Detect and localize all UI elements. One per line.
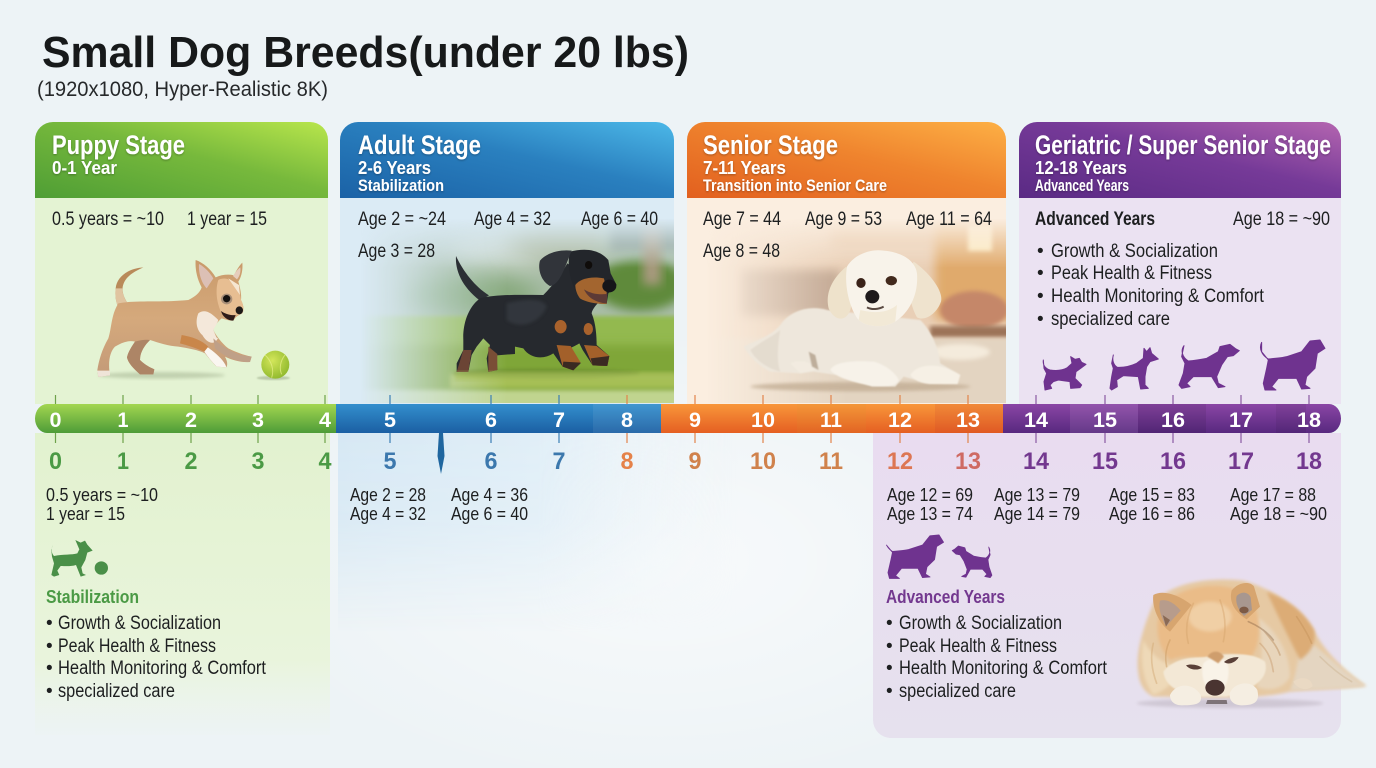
timeline numbers: 13 — [956, 408, 980, 432]
list: geriatric care: • — [1037, 241, 1044, 262]
list: puppy care: • — [46, 636, 53, 657]
header: geriatric: 12-18 Years — [1035, 157, 1127, 178]
lower ages: geriatric: Age 13 = 79 — [994, 484, 1080, 505]
timeline numbers: 9 — [689, 408, 701, 432]
ages: adult — [358, 209, 658, 262]
lower ages: adult: Age 4 = 32 — [350, 503, 426, 524]
header: puppy — [35, 122, 328, 198]
lower scale numbers: 5 — [384, 448, 396, 475]
ages: puppy — [52, 209, 267, 230]
lower ages: geriatric: Age 13 = 74 — [887, 503, 973, 524]
list: geriatric care — [1037, 241, 1265, 330]
ages: adult: Age 3 = 28 — [358, 241, 435, 262]
icon: green chihuahua and ball — [51, 540, 108, 577]
lower ages: puppy: 1 year = 15 — [46, 503, 125, 524]
list: senior care — [886, 613, 1108, 702]
lower ages: adult: Age 6 = 40 — [451, 503, 528, 524]
lower ages: puppy — [46, 484, 158, 524]
ages: senior: Age 9 = 53 — [805, 209, 882, 230]
timeline numbers: 4 — [319, 408, 331, 432]
timeline upper ticks — [56, 395, 1309, 404]
list: puppy care: Health Monitoring & Comfort — [58, 658, 267, 679]
list: puppy care: specialized care — [58, 681, 175, 702]
list: senior care: • — [886, 681, 893, 702]
icons: four dog silhouettes — [1043, 340, 1325, 390]
lower ages: adult: Age 2 = 28 — [350, 484, 426, 505]
list: senior care: • — [886, 658, 893, 679]
lower scale numbers: 12 — [887, 448, 913, 475]
lower scale numbers: 1 — [117, 448, 129, 475]
list: puppy care: • — [46, 613, 53, 634]
heading: stabilization: Stabilization — [46, 586, 139, 607]
list: puppy care: Peak Health & Fitness — [58, 636, 216, 657]
ages: senior — [703, 209, 992, 262]
timeline numbers: 3 — [252, 408, 264, 432]
list: puppy care: • — [46, 658, 53, 679]
list: geriatric care: Peak Health & Fitness — [1051, 263, 1212, 284]
timeline numbers: 17 — [1229, 408, 1253, 432]
lower ages: geriatric: Age 15 = 83 — [1109, 484, 1195, 505]
ages: adult: Age 6 = 40 — [581, 209, 658, 230]
header: senior: 7-11 Years — [703, 157, 786, 178]
list: puppy care: • — [46, 681, 53, 702]
header: puppy: Puppy Stage — [52, 130, 185, 160]
list: geriatric care: • — [1037, 286, 1044, 307]
ages: senior: Age 8 = 48 — [703, 241, 780, 262]
lower scale numbers: 0 — [49, 448, 62, 475]
photo: maltese on carpet — [731, 222, 1006, 403]
ages: geriatric: Age 18 = ~90 — [1233, 209, 1330, 230]
list: puppy care — [46, 613, 267, 702]
timeline numbers: 5 — [384, 408, 396, 432]
timeline numbers: 10 — [751, 408, 775, 432]
lower scale numbers: 13 — [955, 448, 981, 475]
list: geriatric care: specialized care — [1051, 309, 1170, 330]
heading: advanced years: Advanced Years — [886, 586, 1005, 607]
lower scale numbers: 16 — [1160, 448, 1186, 475]
list: senior care: Growth & Socialization — [899, 613, 1062, 634]
lower scale numbers: 9 — [688, 448, 702, 475]
header: puppy: 0-1 Year — [52, 157, 117, 178]
lower ages: geriatric: Age 14 = 79 — [994, 503, 1080, 524]
lower ages: puppy: 0.5 years = ~10 — [46, 484, 158, 505]
lower scale numbers: 3 — [252, 448, 264, 475]
ages: puppy: 1 year = 15 — [187, 209, 267, 230]
photo: chihuahua puppy with ball — [97, 260, 290, 380]
lower scale numbers — [49, 448, 1322, 475]
header: geriatric — [1019, 122, 1341, 198]
panel: adult stage — [340, 122, 674, 404]
header: adult: Adult Stage — [358, 130, 481, 160]
panel: geriatric stage — [1019, 122, 1341, 404]
lower ages: geriatric: Age 16 = 86 — [1109, 503, 1195, 524]
list: senior care: Peak Health & Fitness — [899, 636, 1057, 657]
marker: blue dart — [438, 433, 444, 474]
header: senior: Senior Stage — [703, 130, 838, 160]
ages: geriatric — [1035, 209, 1330, 230]
subtitle: (1920x1080, Hyper-Realistic 8K) — [37, 78, 328, 101]
lower scale numbers: 10 — [750, 448, 776, 475]
timeline numbers: 7 — [553, 408, 565, 432]
header: senior: Transition into Senior Care — [703, 176, 887, 195]
ages: senior: Age 11 = 64 — [906, 209, 992, 230]
ages: geriatric: Advanced Years — [1035, 209, 1155, 230]
list: senior care: • — [886, 636, 893, 657]
title: Small Dog Breeds(under 20 lbs) — [42, 28, 689, 77]
timeline numbers: 8 — [621, 408, 633, 432]
lower ages: geriatric: Age 17 = 88 — [1230, 484, 1316, 505]
timeline numbers — [50, 408, 1321, 432]
timeline numbers: 2 — [185, 408, 197, 432]
panel: geriatric lower details background — [873, 433, 1341, 738]
lower scale numbers: 7 — [552, 448, 566, 475]
lower ages: geriatric: Age 18 = ~90 — [1230, 503, 1327, 524]
timeline numbers: 1 — [118, 408, 129, 432]
timeline bar — [35, 404, 1341, 433]
timeline numbers: 6 — [485, 408, 497, 432]
lower scale numbers: 14 — [1023, 448, 1050, 475]
icons: large and small purple dogs — [886, 535, 992, 578]
lower scale numbers: 17 — [1228, 448, 1254, 475]
list: geriatric care: Growth & Socialization — [1051, 241, 1218, 262]
panel: adult lower details background — [338, 433, 622, 591]
lower scale numbers: 11 — [819, 448, 843, 475]
header: adult — [340, 122, 674, 198]
header: geriatric: Advanced Years — [1035, 176, 1129, 195]
lower scale numbers: 18 — [1296, 448, 1322, 475]
panel: senior stage — [687, 122, 1006, 404]
timeline numbers: 12 — [888, 408, 912, 432]
photo: dachshund on grass — [366, 222, 674, 403]
lower ages: geriatric: Age 12 = 69 — [887, 484, 973, 505]
ages: senior: Age 7 = 44 — [703, 209, 781, 230]
ages: puppy: 0.5 years = ~10 — [52, 209, 164, 230]
lower ages: adult — [350, 484, 528, 524]
panel: puppy stage — [35, 122, 328, 404]
list: geriatric care: • — [1037, 309, 1044, 330]
header: adult: 2-6 Years — [358, 157, 431, 178]
list: senior care: specialized care — [899, 681, 1016, 702]
lower scale numbers: 15 — [1092, 448, 1118, 475]
list: senior care: Health Monitoring & Comfort — [899, 658, 1108, 679]
list: puppy care: Growth & Socialization — [58, 613, 221, 634]
timeline numbers: 14 — [1024, 408, 1048, 432]
lower scale numbers: 2 — [184, 448, 198, 475]
timeline lower ticks — [56, 433, 1309, 443]
list: geriatric care: Health Monitoring & Comfort — [1051, 286, 1265, 307]
lower scale numbers: 6 — [484, 448, 498, 475]
ages: adult: Age 4 = 32 — [474, 209, 551, 230]
ages: adult: Age 2 = ~24 — [358, 209, 446, 230]
lower ages: geriatric — [887, 484, 1327, 524]
lower ages: adult: Age 4 = 36 — [451, 484, 528, 505]
list: senior care: • — [886, 613, 893, 634]
timeline numbers: 18 — [1297, 408, 1321, 432]
timeline numbers: 0 — [50, 408, 62, 432]
list: geriatric care: • — [1037, 263, 1044, 284]
timeline numbers: 16 — [1161, 408, 1185, 432]
panel: puppy lower details background — [35, 433, 330, 735]
photo: sleeping pomeranian — [1137, 580, 1367, 708]
header: senior — [687, 122, 1006, 198]
timeline numbers: 15 — [1093, 408, 1117, 432]
header: adult: Stabilization — [358, 176, 444, 195]
lower scale numbers: 8 — [620, 448, 634, 475]
timeline numbers: 11 — [820, 408, 842, 432]
lower scale numbers: 4 — [318, 448, 332, 475]
